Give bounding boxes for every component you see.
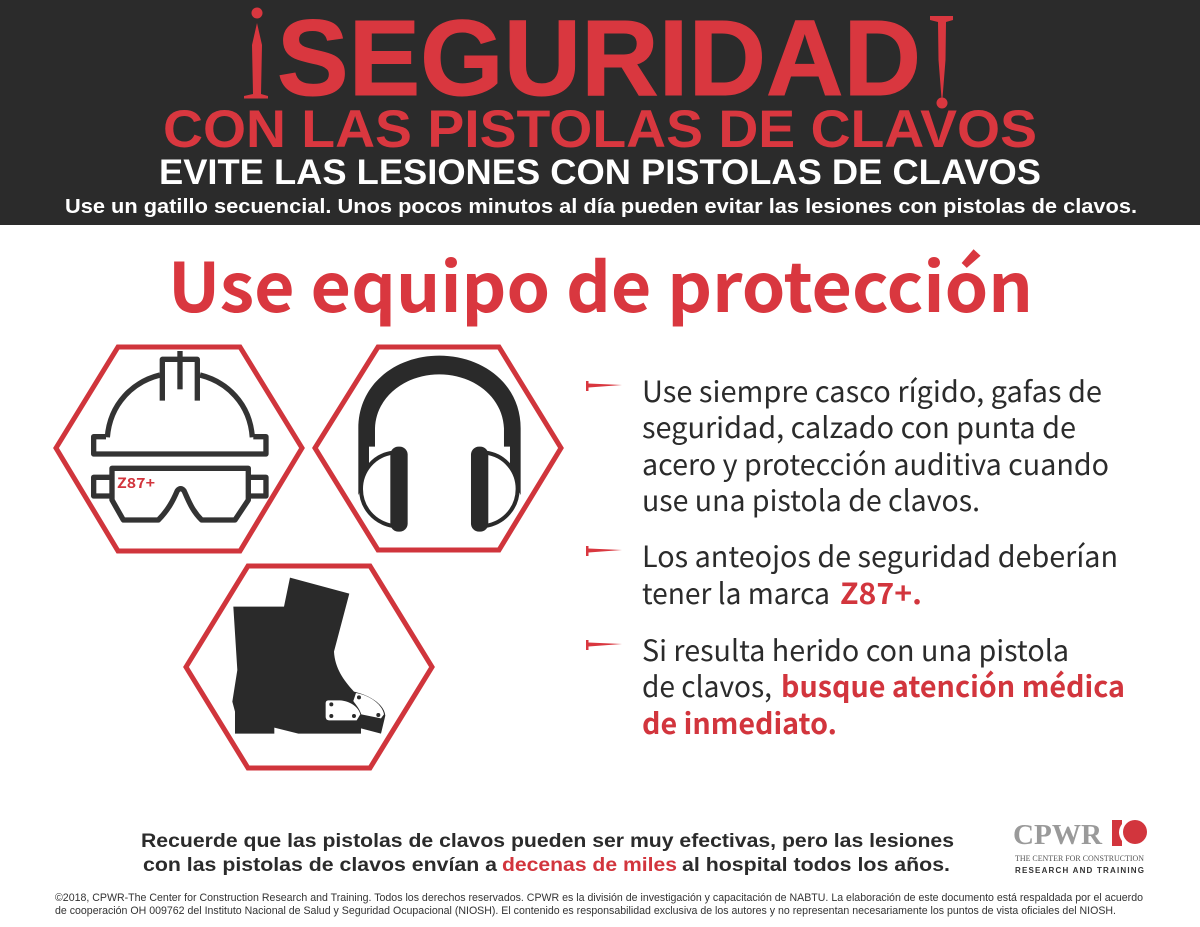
panel: ear protection — [315, 347, 561, 550]
logo: CPWR: CPWR — [1013, 819, 1103, 851]
reminder text: Recuerde que las pistolas de clavos pueden ser muy efectivas, pero las lesiones — [141, 831, 954, 852]
bullet text: acero y protección auditiva cuando — [642, 442, 1109, 484]
bullet text: tener la marca — [642, 571, 830, 613]
icon: nail bullet — [586, 381, 622, 391]
title: seguridad: SEGURIDAD — [277, 0, 921, 118]
bullet 2 — [586, 534, 1118, 613]
icon: inverted exclamation nail — [244, 8, 268, 98]
bullet text — [642, 534, 1118, 613]
logo: CPWR — [1013, 819, 1147, 875]
panel: steel toe boots — [186, 566, 432, 768]
tagline: EVITE LAS LESIONES CON PISTOLAS DE CLAVOS — [159, 153, 1041, 192]
logo: CPWR: THE CENTER FOR CONSTRUCTION — [1015, 853, 1144, 863]
bullet text: busque atención médica — [781, 664, 1125, 706]
heading: Use equipo de protección — [168, 233, 1033, 332]
bullet text — [642, 628, 1125, 743]
logo: CPWR: RESEARCH AND TRAINING — [1015, 866, 1144, 875]
header note: Use un gatillo secuencial. Unos pocos minutos al día pueden evitar las lesiones con pistolas de clavos. — [65, 195, 1137, 218]
label: Z87+ on goggles: Z87+ — [117, 473, 155, 493]
footer copyright: ©2018, CPWR-The Center for Construction Research and Training. Todos los derechos reservados. CPWR es la división de investigación y capacitación de NABTU. La elaboración de este documento está respaldada por el acuerdo — [55, 892, 1143, 904]
reminder text: decenas de miles — [502, 855, 677, 876]
reminder text — [141, 831, 954, 876]
bullet text: Los anteojos de seguridad deberían — [642, 534, 1118, 576]
icon: boot — [232, 578, 385, 734]
icon: earmuffs — [358, 356, 521, 532]
bullet text: Z87+. — [840, 571, 922, 613]
bullet 1 — [586, 369, 1109, 520]
icon: safety goggles — [94, 468, 266, 520]
bullet text: de inmediato. — [642, 701, 837, 743]
bullet text: use una pistola de clavos. — [642, 478, 980, 520]
panel: helmet and goggles — [56, 347, 302, 551]
bullet text: seguridad, calzado con punta de — [642, 405, 1076, 447]
reminder text: al hospital todos los años. — [682, 855, 950, 876]
icon: exclamation nail — [930, 16, 953, 108]
bullet text: Use siempre casco rígido, gafas de — [642, 369, 1102, 411]
icon: nail bullet — [586, 640, 622, 650]
icon: hard hat — [94, 351, 266, 454]
subtitle: CON LAS PISTOLAS DE CLAVOS — [163, 100, 1037, 159]
bullet text: de clavos, — [642, 664, 772, 706]
header banner — [0, 0, 1200, 225]
icon: nail bullet — [586, 546, 622, 556]
reminder text: con las pistolas de clavos envían a — [143, 855, 497, 876]
bullet 3 — [586, 628, 1125, 743]
bullet text: Si resulta herido con una pistola — [642, 628, 1069, 670]
footer copyright — [55, 892, 1143, 917]
footer copyright: de cooperación OH 009762 del Instituto Nacional de Salud y Seguridad Ocupacional (NIOSH). El contenido es responsabilidad exclusiva de los autores y no representan necesariamente los puntos de vista oficiales del NIOSH. — [55, 905, 1116, 917]
bullet text — [642, 369, 1109, 520]
